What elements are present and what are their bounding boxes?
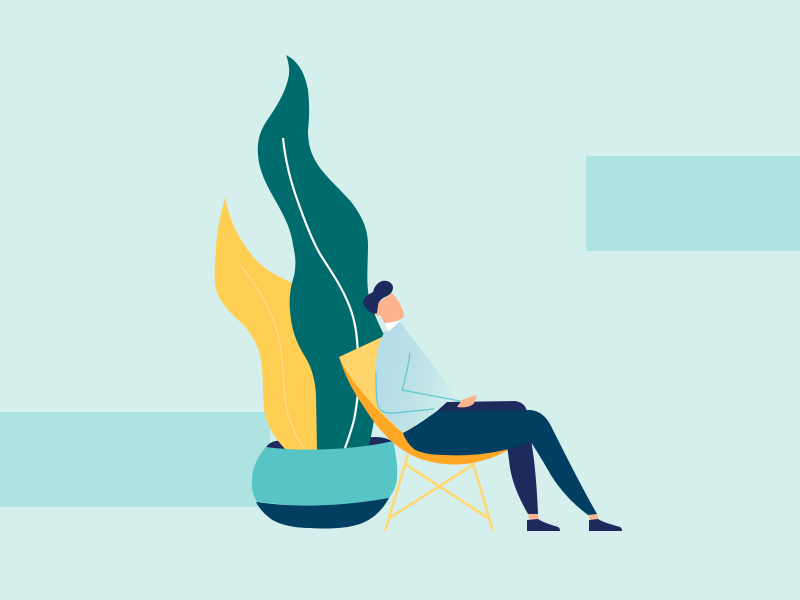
background block: left xyxy=(0,412,270,507)
plant: green leaf xyxy=(258,55,392,452)
ear xyxy=(375,310,381,316)
near ankle xyxy=(588,514,599,521)
yellow leaf vein xyxy=(241,266,305,449)
plant: yellow leaf xyxy=(215,197,318,452)
green leaf vein xyxy=(283,138,358,448)
pot xyxy=(252,441,397,529)
far lower leg xyxy=(507,440,538,514)
neck xyxy=(380,315,398,323)
near shoe xyxy=(589,519,622,531)
pot base stripe xyxy=(256,498,389,529)
far shoe xyxy=(527,519,560,531)
background block: right xyxy=(586,156,800,251)
far ankle xyxy=(528,514,539,521)
collar xyxy=(385,321,400,332)
shirt fold lines xyxy=(376,353,460,413)
hair xyxy=(363,281,393,314)
near leg xyxy=(403,410,597,515)
chair legs xyxy=(385,455,493,531)
pot inner rim xyxy=(265,437,394,452)
chair shell yellow face xyxy=(339,337,420,440)
chair seat shell xyxy=(339,337,510,464)
chair shell orange edge xyxy=(339,357,510,464)
shirt xyxy=(376,322,458,433)
hand xyxy=(457,395,477,407)
far thigh xyxy=(430,401,527,425)
face xyxy=(376,293,404,321)
pot body xyxy=(252,441,397,508)
man xyxy=(363,281,622,531)
